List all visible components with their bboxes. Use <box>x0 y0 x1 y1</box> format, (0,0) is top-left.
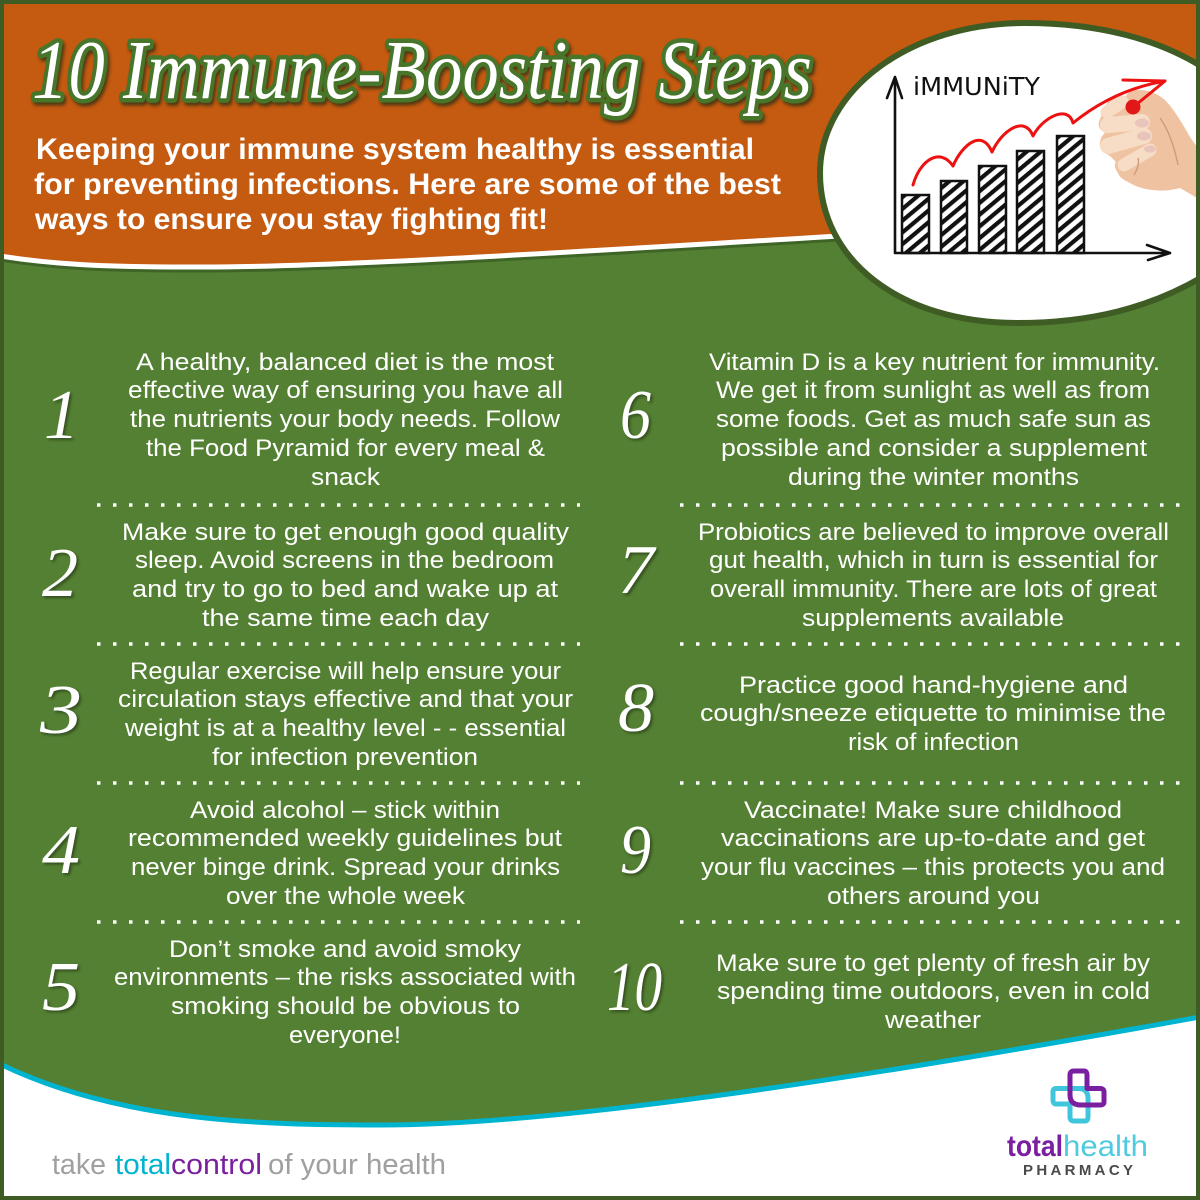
tagline: of your health <box>268 1149 446 1181</box>
intro text: Keeping your immune system healthy is essential <box>36 133 754 166</box>
step 9 text: your flu vaccines – this protects you and <box>701 854 1165 881</box>
step 6 text: Vitamin D is a key nutrient for immunity. <box>709 349 1160 376</box>
step numbers: 1 <box>44 377 79 454</box>
step numbers: 8 <box>618 670 654 747</box>
step 9 text: others around you <box>827 883 1040 910</box>
step numbers: 3 <box>39 672 82 749</box>
step 8 text: Practice good hand-hygiene and <box>739 672 1128 699</box>
step 1 text: the nutrients your body needs. Follow <box>130 406 561 433</box>
step numbers: 10 <box>607 949 662 1026</box>
step 8 text: cough/sneeze etiquette to minimise the <box>700 700 1166 727</box>
step 9 text <box>701 797 1165 910</box>
step 9 text: Vaccinate! Make sure childhood <box>744 797 1122 824</box>
hand <box>1099 90 1197 198</box>
step 1 text: snack <box>311 464 381 491</box>
header wave shadow <box>0 240 840 271</box>
step 3 text: weight is at a healthy level - - essential <box>124 715 566 742</box>
chart label: iMMUNiTY <box>913 72 1041 101</box>
logo wordmark: total <box>1007 1130 1063 1163</box>
step 1 text: A healthy, balanced diet is the most <box>136 349 554 376</box>
step 3 text: circulation stays effective and that your <box>118 686 573 713</box>
step numbers: 7 <box>618 532 657 609</box>
step numbers: 2 <box>42 535 78 612</box>
step 6 text: We get it from sunlight as well as from <box>716 377 1150 404</box>
intro text: ways to ensure you stay fighting fit! <box>34 203 548 236</box>
logo wordmark: health <box>1063 1130 1148 1163</box>
step 7 text: supplements available <box>802 605 1064 632</box>
step numbers: 6 <box>620 377 651 454</box>
title: 10 Immune-Boosting Steps <box>32 24 812 117</box>
step 7 text: overall immunity. There are lots of great <box>710 576 1157 603</box>
step 7 text: Probiotics are believed to improve overall <box>698 519 1169 546</box>
step 5 text: smoking should be obvious to <box>171 993 520 1020</box>
tagline <box>52 1149 446 1181</box>
intro text: for preventing infections. Here are some of the best <box>34 168 781 201</box>
step numbers: 4 <box>42 812 80 889</box>
step 2 text: Make sure to get enough good quality <box>122 519 569 546</box>
step 3 text: for infection prevention <box>212 744 478 771</box>
step 6 text <box>709 349 1160 491</box>
logo cross <box>1053 1071 1104 1121</box>
immunity chart illustration <box>820 23 1200 323</box>
step 10 text: weather <box>884 1007 981 1034</box>
step 4 text: recommended weekly guidelines but <box>128 825 562 852</box>
step 5 text: everyone! <box>289 1022 401 1049</box>
step 8 text <box>700 672 1166 756</box>
tagline: total <box>115 1149 171 1181</box>
panel: white footer <box>0 1017 1200 1200</box>
step 5 text: Don’t smoke and avoid smoky <box>169 936 521 963</box>
bars <box>902 136 1084 253</box>
step 7 text: gut health, which in turn is essential for <box>709 547 1158 574</box>
step 4 text <box>128 797 562 910</box>
step 2 text: the same time each day <box>202 605 489 632</box>
step 1 text: the Food Pyramid for every meal & <box>146 435 545 462</box>
intro text <box>34 133 781 236</box>
step 5 text: environments – the risks associated with <box>114 964 576 991</box>
logo pharmacy label: PHARMACY <box>1023 1162 1133 1179</box>
step numbers: 9 <box>620 812 651 889</box>
step 10 text <box>716 950 1150 1034</box>
axes <box>887 77 1170 260</box>
step 10 text: Make sure to get plenty of fresh air by <box>716 950 1150 977</box>
panel: orange header <box>0 0 1200 267</box>
step 5 text <box>114 936 576 1049</box>
tagline: control <box>171 1149 262 1181</box>
oval frame <box>820 23 1200 323</box>
header white wave <box>0 236 840 267</box>
step 7 text <box>698 519 1169 632</box>
step 2 text <box>122 519 569 632</box>
marker tip <box>1126 100 1140 114</box>
step 4 text: Avoid alcohol – stick within <box>190 797 500 824</box>
tagline: take <box>52 1149 106 1181</box>
logo wordmark <box>1007 1130 1148 1163</box>
step 6 text: some foods. Get as much safe sun as <box>716 406 1151 433</box>
step 4 text: over the whole week <box>226 883 466 910</box>
red trend line <box>913 80 1165 185</box>
footer cyan wave <box>0 1017 1200 1125</box>
step 6 text: possible and consider a supplement <box>721 435 1147 462</box>
step 8 text: risk of infection <box>848 729 1019 756</box>
steps left column <box>114 349 576 1049</box>
step 2 text: sleep. Avoid screens in the bedroom <box>135 547 554 574</box>
step 9 text: vaccinations are up-to-date and get <box>721 825 1145 852</box>
step 4 text: never binge drink. Spread your drinks <box>131 854 560 881</box>
step 3 text: Regular exercise will help ensure your <box>130 658 561 685</box>
step 6 text: during the winter months <box>788 464 1079 491</box>
step 1 text: effective way of ensuring you have all <box>128 377 563 404</box>
logo <box>1007 1071 1148 1179</box>
step numbers: 5 <box>42 949 80 1026</box>
step 3 text <box>118 658 573 771</box>
step 10 text: spending time outdoors, even in cold <box>717 978 1150 1005</box>
steps right column <box>698 349 1169 1034</box>
step 2 text: and try to go to bed and wake up at <box>132 576 558 603</box>
step numbers <box>39 377 662 1026</box>
step 1 text <box>128 349 563 491</box>
